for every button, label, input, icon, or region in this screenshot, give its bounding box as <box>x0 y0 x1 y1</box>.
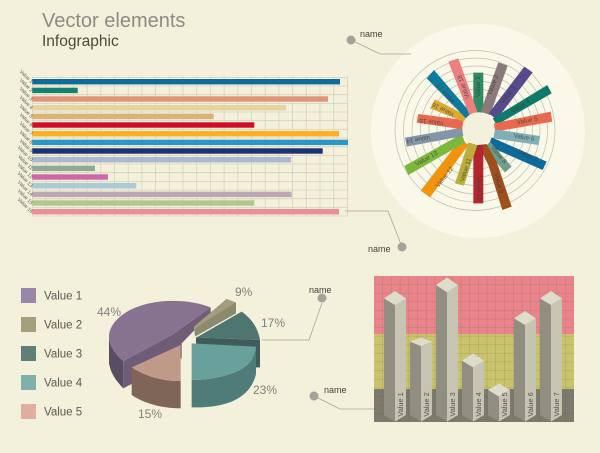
column labels: Value 6 <box>526 392 535 417</box>
pie labels <box>97 285 285 421</box>
callout: radial name: name <box>360 29 383 39</box>
legend: Value 1 <box>44 290 82 302</box>
ray labels: Value 16 <box>430 100 456 118</box>
title: Vector elements <box>42 10 185 32</box>
slice: 15% <box>132 345 181 408</box>
column labels: Value 5 <box>500 392 509 417</box>
ray labels: Value 18 <box>456 73 471 99</box>
ray labels: Value 4 <box>510 98 532 115</box>
ray labels: Value 11 <box>459 157 473 183</box>
title <box>42 10 185 50</box>
slice: 9% <box>194 299 236 337</box>
ray labels: Value 15 <box>419 116 444 127</box>
bar labels <box>16 69 34 215</box>
bar labels: Value 3 <box>18 86 34 102</box>
slice: 44% <box>109 301 211 388</box>
bar labels: Value 9 <box>18 138 34 154</box>
ray labels: Value 5 <box>516 116 539 126</box>
rings <box>395 50 555 210</box>
callout: columns name <box>310 385 374 409</box>
ray labels: Value 3 <box>499 84 518 105</box>
legend: Value 5 <box>44 406 82 418</box>
panel: horizontal bar chart <box>16 69 348 216</box>
column labels: Value 3 <box>448 392 457 417</box>
bar labels: Value 16 <box>16 197 34 215</box>
ray labels: Value 2 <box>486 73 500 96</box>
column labels <box>396 392 561 417</box>
grid <box>374 276 574 422</box>
rays <box>404 58 552 210</box>
halo circle <box>371 24 585 238</box>
pie labels: 17% <box>261 316 285 330</box>
centre circle <box>462 112 494 144</box>
bar labels: Value 8 <box>18 130 34 146</box>
pie labels: 9% <box>235 285 253 299</box>
bar labels: Value 4 <box>18 95 34 111</box>
bar labels: Value 7 <box>18 121 34 137</box>
ray labels: Value 6 <box>513 132 535 143</box>
bar labels: Value 1 <box>18 69 34 85</box>
callout: bar chart name <box>345 211 406 254</box>
bar labels: Value 12 <box>16 162 34 180</box>
callout: columns name: name <box>324 385 347 395</box>
ray labels: Value 10 <box>475 176 482 201</box>
callout: pie name: name <box>309 285 332 295</box>
callout: pie name <box>262 285 332 340</box>
ray labels <box>405 73 539 201</box>
callout: radial name <box>346 29 411 54</box>
ray labels: Value 13 <box>414 150 439 168</box>
pie labels: 15% <box>138 407 162 421</box>
bar labels: Value 11 <box>16 154 34 172</box>
pie labels: 23% <box>253 383 277 397</box>
ray labels: Value 12 <box>435 165 456 189</box>
slice: 23% <box>192 343 256 407</box>
legend: Value 3 <box>44 348 82 360</box>
column labels: Value 4 <box>474 392 483 417</box>
pie chart <box>97 285 285 421</box>
legend: Value 2 <box>44 320 82 332</box>
bar labels: Value 2 <box>18 78 34 94</box>
slice: 17% <box>196 312 260 367</box>
pie labels: 44% <box>97 305 121 319</box>
panel: 3D column chart <box>374 276 574 422</box>
panel: radial chart <box>371 24 585 238</box>
grid <box>32 76 348 216</box>
bar labels: Value 6 <box>18 112 34 128</box>
ray labels: Value 17 <box>435 81 457 105</box>
bars <box>32 79 348 214</box>
ray labels: Value 7 <box>516 148 539 163</box>
columns <box>384 278 562 422</box>
bar labels: Value 15 <box>16 188 34 206</box>
ray labels: Value 1 <box>475 76 482 97</box>
bar labels: Value 5 <box>18 104 34 120</box>
ray labels: Value 14 <box>405 133 431 145</box>
legend: Value 4 <box>44 378 83 390</box>
ray labels: Value 9 <box>492 172 505 195</box>
bar labels: Value 13 <box>16 171 34 189</box>
bar labels: Value 10 <box>16 145 34 163</box>
title: Infographic <box>42 33 119 50</box>
background bands <box>374 276 574 334</box>
column labels: Value 2 <box>422 392 431 417</box>
ray labels: Value 8 <box>489 145 508 166</box>
legend <box>21 288 83 419</box>
bar labels: Value 14 <box>16 180 34 198</box>
column labels: Value 7 <box>552 392 561 417</box>
column labels: Value 1 <box>396 392 405 417</box>
callout: bar chart name: name <box>368 244 391 254</box>
